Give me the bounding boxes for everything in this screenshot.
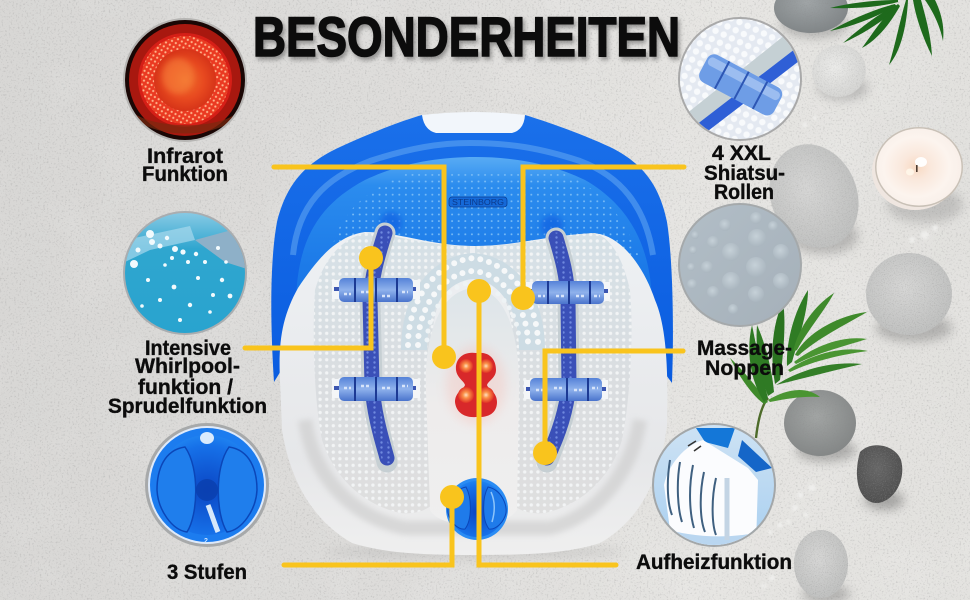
salt scatter [762,116,938,588]
label: Intensive Whirlpoolfunktion / Sprudelfunktion [108,337,267,418]
tray slope shading [305,420,640,528]
label: Infrarot Funktion [142,145,228,186]
photo: whirlpool water [120,210,250,340]
shiatsu roller top right [526,281,610,304]
line: Shiatsu [523,167,684,298]
logo: Steinborg: STEINBORG [452,198,504,207]
center hump [426,288,519,525]
photo: heating element close-up [652,423,776,547]
label: 4 XXL Shiatsu-Rollen: Shiatsu- [704,162,785,185]
callout dots [359,246,557,509]
photo: infrared lamp [120,15,250,145]
label: Massage-Noppen: Noppen [705,357,784,380]
label: Aufheizfunktion: Aufheizfunktion [636,551,792,574]
label: Infrarot Funktion: Infrarot [147,145,223,168]
label: Intensive Whirlpoolfunktion / Sprudelfunktion: Sprudelfunktion [108,395,267,418]
line: Infrarot [274,167,444,357]
photo: shiatsu roller close-up [675,15,805,145]
blue lid rim [271,115,673,383]
line: Massage-Noppen [545,351,683,453]
icon: lower palm leaves [730,290,868,438]
label: 4 XXL Shiatsu-Rollen [704,142,785,204]
right foot well [475,233,632,513]
callout lines [245,167,684,565]
highlight on rim [293,143,653,255]
right strap [547,238,569,462]
level dial [446,478,508,540]
label: Massage-Noppen: Massage- [697,337,792,360]
label: Intensive Whirlpoolfunktion / Sprudelfunktion: funktion / [138,376,233,399]
dial numbers: 2 [204,538,208,545]
left foot well [314,233,470,513]
shiatsu roller bottom right [524,378,608,401]
icon: top palm leaves [830,0,943,65]
basin shadow [325,545,625,559]
foot spa basin [271,112,673,559]
line: Aufheizfunktion [479,291,616,565]
photo: level dial close-up [145,423,269,547]
label: 4 XXL Shiatsu-Rollen: 4 XXL [712,142,771,165]
handle [422,112,525,133]
label: Infrarot Funktion: Funktion [142,163,228,186]
infrared light [446,345,506,425]
label: 3 Stufen: 3 Stufen [167,561,247,584]
massage nubs ring [408,258,538,345]
lid inner panel [296,157,652,300]
label: Intensive Whirlpoolfunktion / Sprudelfunktion: Whirlpool- [135,355,240,378]
decoration: stones, candle and palm leaves [730,0,963,600]
label: Massage-Noppen [697,337,792,380]
photo: massage nubs close-up [678,203,802,327]
label: 4 XXL Shiatsu-Rollen: Rollen [714,181,774,204]
label: Intensive Whirlpoolfunktion / Sprudelfunktion: Intensive [145,337,231,360]
left and right pockets [380,212,402,234]
shiatsu roller bottom left [332,377,420,401]
icon: tealight candle [872,127,963,210]
line: Whirlpool [245,258,371,348]
shiatsu roller top left [332,278,420,302]
white tray [280,232,667,555]
title: BESONDERHEITEN [253,5,680,68]
line: 3 Stufen [284,497,452,565]
nub band behind hump [414,266,532,350]
left strap [370,233,387,462]
